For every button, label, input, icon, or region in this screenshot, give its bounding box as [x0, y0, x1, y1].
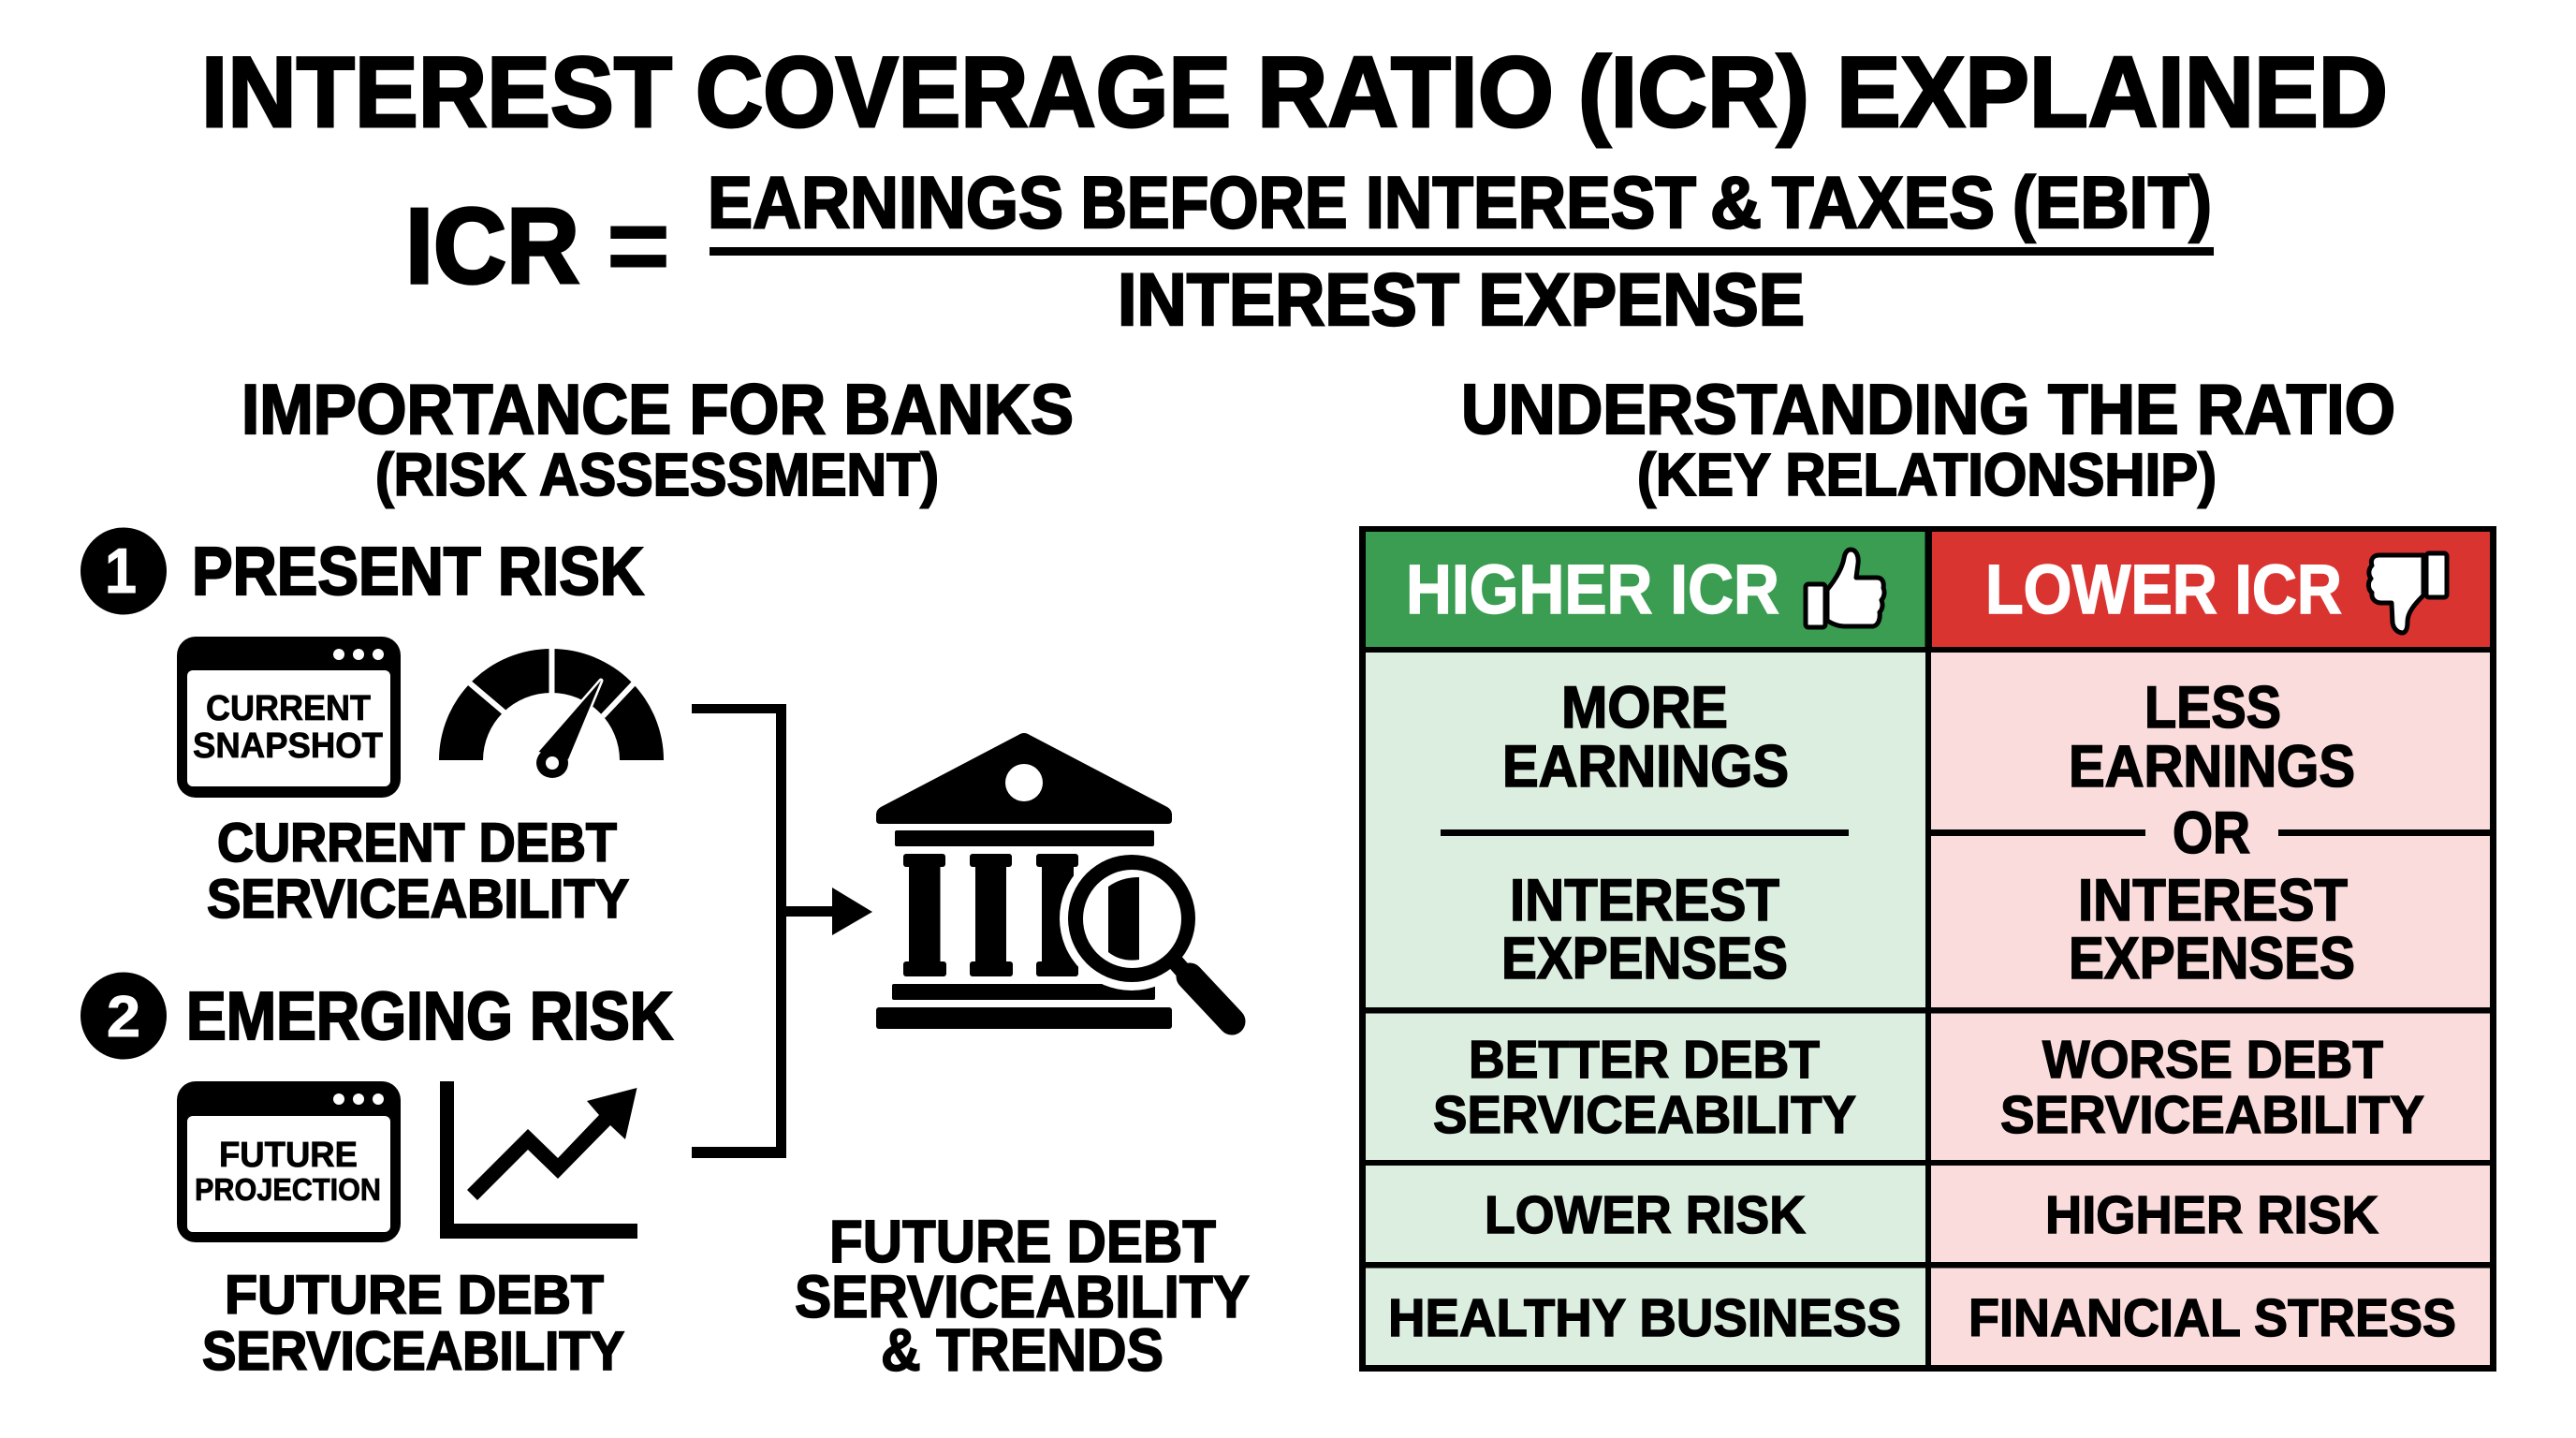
row: debt serviceability, higher ICR: BETTER DEBT [1469, 1030, 1820, 1090]
row: earnings or interest expenses, lower ICR: OR [2173, 800, 2250, 866]
row: outcome, lower ICR: FINANCIAL STRESS [1969, 1288, 2456, 1348]
caption: future debt serviceability and trends: FUTURE DEBT [829, 1208, 1216, 1275]
caption: current debt serviceability [207, 813, 629, 930]
columns [903, 854, 1078, 976]
icon: bank with magnifying glass [876, 733, 1232, 1029]
caption: current debt serviceability: CURRENT DEBT [217, 813, 617, 873]
numerator: TAXES [1772, 161, 1995, 243]
caption: future debt serviceability and trends: & TRENDS [881, 1316, 1164, 1384]
header: lower ICR: LOWER ICR [1985, 550, 2342, 628]
heading: importance for banks [242, 370, 1074, 508]
icon: future projection window: FUTURE [219, 1136, 358, 1175]
numerator: & [1710, 161, 1762, 243]
fraction bar [710, 247, 2214, 256]
caption: future debt serviceability [202, 1265, 624, 1382]
title [201, 36, 2388, 148]
badge: number 2: 2 [107, 985, 140, 1049]
row: earnings or interest expenses, lower ICR: EARNINGS [2069, 734, 2355, 800]
heading: understanding the ratio: (KEY RELATIONSHIP) [1637, 441, 2217, 508]
icon: future projection window [177, 1081, 401, 1242]
equals sign: = [607, 186, 670, 305]
icon: rising trend chart [440, 1081, 637, 1239]
magnifying glass [1060, 846, 1232, 1021]
row: debt serviceability, lower ICR [2000, 1030, 2424, 1145]
roof [876, 733, 1172, 824]
numerator [708, 161, 2212, 243]
row: risk, higher ICR: LOWER RISK [1485, 1185, 1806, 1245]
title: (ICR) [1578, 36, 1809, 148]
row: earnings or interest expenses, lower ICR: INTEREST [2078, 868, 2348, 933]
numerator: INTEREST [1366, 161, 1696, 243]
badge: number 2 [80, 972, 167, 1060]
arrow: bracket joining both risks into the bank [692, 704, 872, 1158]
numerator: EARNINGS [708, 161, 1063, 243]
present risk heading: PRESENT RISK [192, 535, 644, 609]
icon: thumbs up [1806, 550, 1884, 627]
row: earnings and interest expenses, higher ICR: MORE [1561, 675, 1728, 741]
icon: gauge [439, 644, 664, 778]
caption: current debt serviceability: SERVICEABILITY [207, 869, 629, 930]
caption: future debt serviceability and trends [795, 1208, 1250, 1384]
denominator: INTEREST EXPENSE [1118, 257, 1805, 341]
title: COVERAGE [695, 36, 1231, 148]
title: RATIO [1257, 36, 1554, 148]
panel: present risk [80, 528, 664, 930]
caption: future debt serviceability: FUTURE DEBT [225, 1265, 604, 1326]
emerging risk heading: EMERGING RISK [186, 979, 673, 1054]
row: debt serviceability, lower ICR: SERVICEABILITY [2000, 1085, 2424, 1145]
icon: future projection window: PROJECTION [195, 1172, 381, 1207]
heading: importance for banks: IMPORTANCE FOR BANKS [242, 370, 1074, 448]
row: earnings or interest expenses, lower ICR [1928, 675, 2490, 991]
badge: number 1: 1 [105, 536, 137, 607]
row: earnings and interest expenses, higher ICR [1441, 675, 1849, 991]
row: debt serviceability, higher ICR [1433, 1030, 1856, 1145]
row: risk, lower ICR: HIGHER RISK [2045, 1185, 2378, 1245]
row: debt serviceability, lower ICR: WORSE DEBT [2042, 1030, 2383, 1090]
header: higher ICR: HIGHER ICR [1406, 550, 1779, 628]
badge: number 1 [80, 528, 167, 614]
heading: importance for banks: (RISK ASSESSMENT) [375, 441, 939, 508]
icon: current snapshot window: SNAPSHOT [193, 726, 383, 766]
caption: future debt serviceability and trends: SERVICEABILITY [795, 1263, 1250, 1330]
title: EXPLAINED [1837, 36, 2388, 148]
formula [405, 161, 2214, 341]
caption: future debt serviceability: SERVICEABILITY [202, 1321, 624, 1382]
heading: understanding the ratio: UNDERSTANDING THE RATIO [1461, 370, 2395, 448]
numerator: BEFORE [1080, 161, 1348, 243]
table frame and fills [1359, 526, 2496, 1372]
row: earnings or interest expenses, lower ICR: LESS [2144, 675, 2281, 741]
row: earnings or interest expenses, lower ICR: EXPENSES [2069, 926, 2355, 991]
entablature and plinth [876, 830, 1172, 1029]
icon: current snapshot window: CURRENT [206, 689, 371, 728]
numerator: (EBIT) [2012, 161, 2212, 243]
panel: comparison table [1359, 526, 2496, 1372]
icon: thumbs down [2368, 553, 2447, 633]
panel: emerging risk [80, 972, 673, 1382]
icon: current snapshot window [177, 637, 401, 798]
title: INTEREST [201, 36, 672, 148]
formula left side: ICR: ICR [405, 187, 579, 306]
row: earnings and interest expenses, higher ICR: EARNINGS [1502, 734, 1789, 800]
row: earnings and interest expenses, higher ICR: INTEREST [1510, 868, 1779, 933]
row: outcome, higher ICR: HEALTHY BUSINESS [1388, 1288, 1901, 1348]
row: earnings and interest expenses, higher ICR: EXPENSES [1501, 926, 1788, 991]
row: debt serviceability, higher ICR: SERVICEABILITY [1433, 1085, 1856, 1145]
heading: understanding the ratio [1461, 370, 2395, 508]
